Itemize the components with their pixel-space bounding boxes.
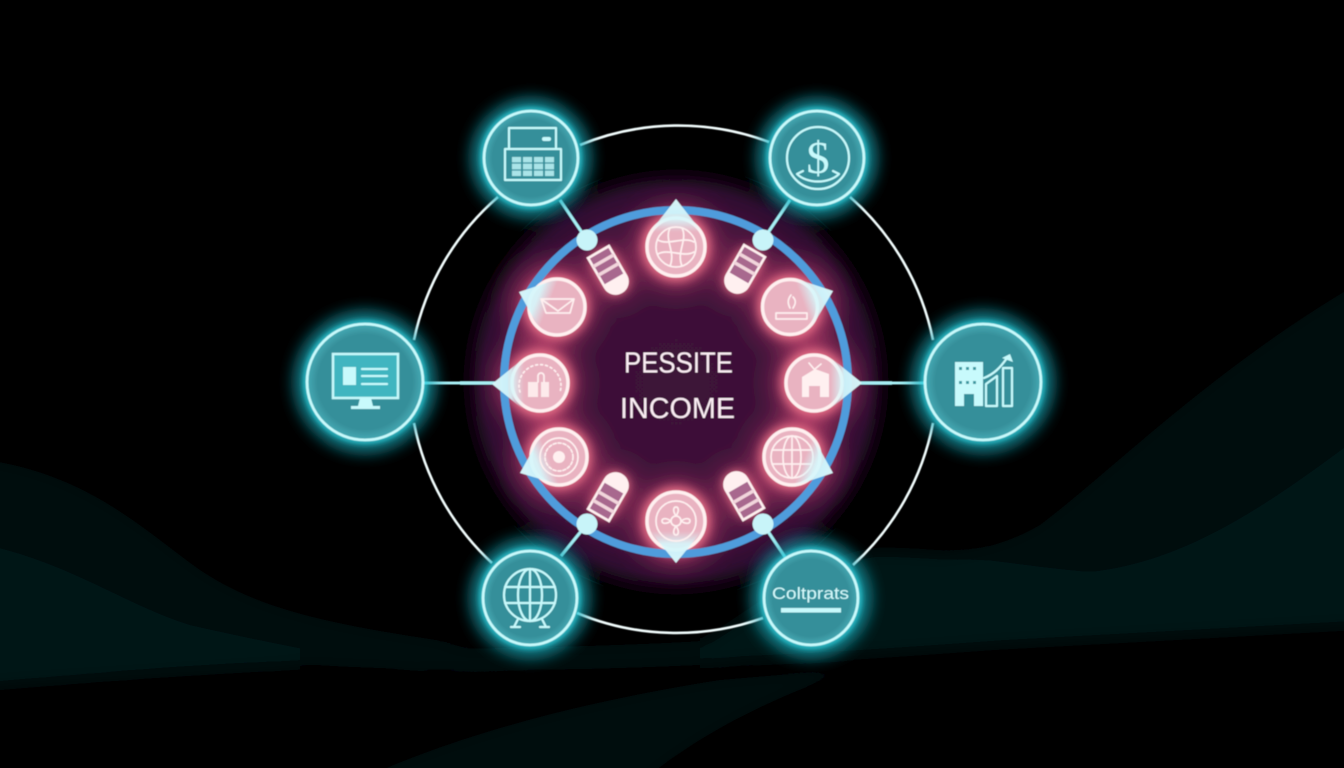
- center title: [620, 348, 735, 425]
- pill: top left: [588, 246, 632, 298]
- pill: top right: [721, 245, 765, 297]
- hub blue ring: [504, 210, 848, 554]
- teal node: dollar: $: [806, 132, 830, 183]
- teal node: globe: [483, 551, 577, 645]
- inner node: top right flame and tray: [762, 278, 833, 334]
- hub wide pink glow: [499, 209, 854, 561]
- center title: INCOME: [620, 393, 735, 425]
- central hub: [460, 166, 892, 598]
- inner node: bottom flower: [647, 492, 705, 563]
- pill: bottom left: [588, 469, 632, 521]
- inner node: right house: [786, 355, 862, 411]
- teal node: building and growth chart: [925, 324, 1041, 440]
- inner node: top globe: [647, 199, 705, 276]
- hub tight pink glow: [507, 213, 847, 555]
- connector lines: [423, 200, 925, 557]
- hub purple halo: [460, 166, 892, 598]
- teal node: Coltprats label: Coltprats: [772, 584, 849, 603]
- inner node: bottom right globe: [764, 429, 833, 486]
- teal node: Coltprats label: [764, 551, 858, 645]
- teal node wide glows: [302, 106, 1046, 650]
- passive income diagram: [302, 106, 1046, 650]
- inner node: bottom left gear: [520, 429, 587, 485]
- teal node: monitor: [307, 324, 423, 440]
- teal node: dollar: [770, 111, 864, 205]
- connector node dots: [576, 230, 774, 534]
- inner node: top left envelope: [519, 279, 585, 335]
- teal node: calculator: [484, 111, 578, 205]
- inner node: left gift gauge: [492, 355, 568, 411]
- center title: PESSITE: [624, 348, 733, 380]
- background teal waves: [0, 250, 1344, 768]
- pill: bottom right: [720, 468, 764, 520]
- teal node tight glows: [306, 110, 1042, 646]
- outer white orbit ring: [414, 126, 933, 633]
